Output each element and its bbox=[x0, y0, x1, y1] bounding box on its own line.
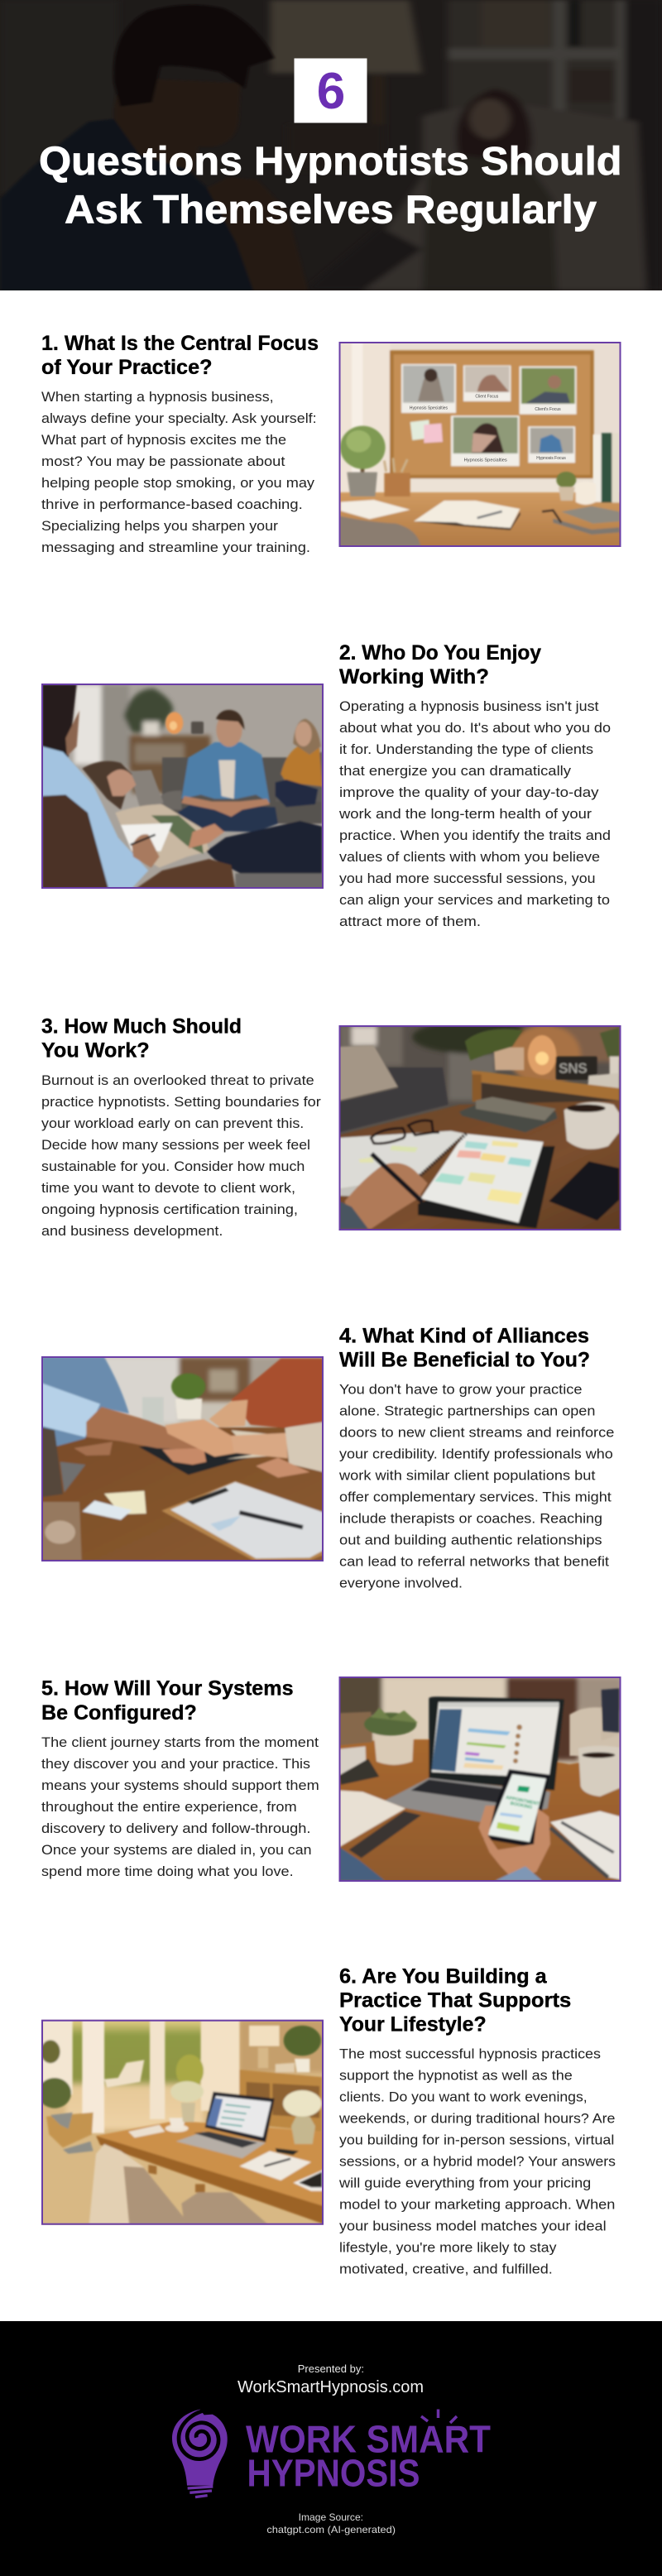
heading 6: 6. Are You Building a bbox=[339, 1964, 548, 1988]
body text 5: The client journey starts from the moment bbox=[41, 1734, 319, 1750]
photo: laptop and phone scheduling bbox=[335, 1673, 625, 1883]
body text 6: will guide everything from your pricing bbox=[338, 2175, 591, 2191]
photo: corkboard on desk: Client's Focus bbox=[535, 407, 561, 412]
body text 3 bbox=[41, 1072, 321, 1239]
wordmark bbox=[246, 2418, 491, 2494]
body text 4: doors to new client streams and reinforce bbox=[339, 1425, 614, 1440]
panel: question 6 bbox=[38, 1964, 616, 2277]
body text 2: it for. Understanding the type of clients bbox=[339, 741, 593, 757]
panel: question 5 bbox=[41, 1673, 625, 1883]
panel: question 4 bbox=[38, 1324, 614, 1590]
heading 5 bbox=[41, 1677, 294, 1725]
body text 4: offer complementary services. This might bbox=[339, 1489, 612, 1504]
heading 3: You Work? bbox=[41, 1039, 150, 1063]
heading 5: Be Configured? bbox=[41, 1701, 197, 1725]
body text 4: can lead to referral networks that benefit bbox=[339, 1554, 609, 1569]
body text 2: you had more successful sessions, you bbox=[339, 871, 596, 886]
heading 1 bbox=[41, 332, 319, 379]
body text 4: out and building authentic relationships bbox=[339, 1533, 602, 1547]
body text 2: that energize you can dramatically bbox=[339, 763, 572, 779]
photo: hypnosis session with clients bbox=[38, 680, 328, 890]
icon: rays above the A bbox=[421, 2410, 457, 2423]
body text 6: The most successful hypnosis practices bbox=[339, 2046, 601, 2062]
body text 6: lifestyle, you're more likely to stay bbox=[339, 2239, 557, 2256]
body text 3: Burnout is an overlooked threat to private bbox=[41, 1072, 314, 1088]
body text 6: your business model matches your ideal bbox=[339, 2218, 607, 2234]
body text 2: can align your services and marketing to bbox=[339, 892, 610, 908]
heading 5: 5. How Will Your Systems bbox=[41, 1677, 294, 1700]
body text 2: improve the quality of your day-to-day bbox=[339, 784, 599, 800]
body text 6: model to your marketing approach. When bbox=[339, 2196, 615, 2213]
body text 5: means your systems should support them bbox=[41, 1777, 319, 1793]
image source credit: chatgpt.com (AI-generated) bbox=[266, 2524, 396, 2535]
heading 1: of Your Practice? bbox=[41, 356, 212, 379]
body text 4: include therapists or coaches. Reaching bbox=[339, 1511, 602, 1526]
wordmark: WORK SMART bbox=[246, 2418, 491, 2461]
title: Ask Themselves Regularly bbox=[65, 189, 597, 232]
photo: corkboard on desk bbox=[335, 339, 625, 549]
body text 3: and business development. bbox=[41, 1223, 223, 1239]
panel: footer bbox=[0, 2321, 662, 2576]
body text 2 bbox=[338, 698, 611, 929]
photo: corkboard on desk: Hypnosis Focus bbox=[536, 456, 566, 461]
body text 2: practice. When you identify the traits and bbox=[339, 827, 611, 843]
body text 5: they discover you and your practice. This bbox=[41, 1756, 310, 1772]
heading 4 bbox=[339, 1324, 590, 1372]
body text 1: When starting a hypnosis business, bbox=[41, 389, 274, 405]
panel: question 2 bbox=[38, 641, 611, 929]
heading 2: Working With? bbox=[339, 665, 489, 688]
body text 2: Operating a hypnosis business isn't just bbox=[339, 698, 599, 714]
body text 1: most? You may be passionate about bbox=[41, 453, 285, 469]
body text 1: helping people stop smoking, or you may bbox=[41, 475, 315, 491]
image source credit: Image Source: bbox=[299, 2511, 363, 2523]
body text 4: alone. Strategic partnerships can open bbox=[339, 1403, 595, 1418]
body text 6: you building for in-person sessions, virtual bbox=[339, 2132, 614, 2148]
body text 4: everyone involved. bbox=[339, 1576, 463, 1590]
logo bbox=[172, 2410, 491, 2497]
heading 6: Your Lifestyle? bbox=[339, 2012, 487, 2036]
body text 1: always define your specialty. Ask yourself: bbox=[41, 410, 317, 426]
body text 6: clients. Do you want to work evenings, bbox=[339, 2089, 588, 2105]
body text 6 bbox=[338, 2046, 616, 2277]
body text 1: Specializing helps you sharpen your bbox=[41, 518, 278, 534]
panel: hero header bbox=[0, 0, 662, 290]
body text 1 bbox=[41, 389, 317, 555]
body text 1: messaging and streamline your training. bbox=[41, 540, 310, 555]
body text 6: weekends, or during traditional hours? Are bbox=[338, 2110, 615, 2127]
body text 1: What part of hypnosis excites me the bbox=[41, 432, 286, 448]
number box bbox=[295, 58, 367, 122]
heading 6 bbox=[339, 1964, 571, 2036]
title: Questions Hypnotists Should bbox=[39, 140, 622, 184]
photo: corkboard on desk: Hypnosis Specialties bbox=[464, 458, 507, 463]
wordmark: HYPNOSIS bbox=[247, 2451, 420, 2494]
photo: planner on coffee table: SNS bbox=[559, 1061, 587, 1077]
presented by label: Presented by: bbox=[298, 2363, 364, 2375]
body text 3: ongoing hypnosis certification training, bbox=[41, 1202, 298, 1217]
body text 3: practice hypnotists. Setting boundaries for bbox=[41, 1094, 321, 1110]
heading 6: Practice That Supports bbox=[339, 1989, 571, 2012]
body text 5: throughout the entire experience, from bbox=[41, 1799, 297, 1815]
body text 5: Once your systems are dialed in, you can bbox=[41, 1842, 311, 1858]
title bbox=[39, 140, 622, 232]
image source credit bbox=[266, 2511, 396, 2535]
photo: laptop and phone scheduling: APPOINTMENT bbox=[506, 1796, 540, 1807]
body text 3: time you want to devote to client work, bbox=[41, 1180, 295, 1196]
heading 3 bbox=[41, 1015, 242, 1063]
heading 1: 1. What Is the Central Focus bbox=[41, 332, 319, 355]
body text 2: attract more of them. bbox=[339, 914, 481, 929]
photo: sunny home office bbox=[38, 2016, 328, 2225]
body text 2: about what you do. It's about who you do bbox=[339, 720, 611, 736]
photo: corkboard on desk: Client Focus bbox=[475, 395, 499, 400]
body text 3: your workload early on can prevent this. bbox=[41, 1115, 304, 1131]
panel: question 3 bbox=[41, 1015, 625, 1239]
heading 4: Will Be Beneficial to You? bbox=[339, 1349, 590, 1372]
heading 2 bbox=[339, 641, 541, 688]
hero background photo bbox=[0, 0, 662, 290]
body text 4: You don't have to grow your practice bbox=[339, 1382, 583, 1397]
body text 5: discovery to delivery and follow-through. bbox=[41, 1820, 311, 1836]
body text 3: sustainable for you. Consider how much bbox=[41, 1158, 305, 1174]
body text 5: spend more time doing what you love. bbox=[41, 1864, 294, 1879]
body text 1: thrive in performance-based coaching. bbox=[41, 496, 303, 512]
photo: laptop and phone scheduling: BOOKING bbox=[510, 1801, 533, 1811]
body text 4: work with similar client populations but bbox=[338, 1468, 596, 1483]
icon: spiral light bulb bbox=[172, 2410, 228, 2497]
heading 4: 4. What Kind of Alliances bbox=[339, 1324, 589, 1347]
photo: stacked hands at table bbox=[38, 1353, 328, 1562]
panel: question 1 bbox=[41, 332, 625, 555]
body text 3: Decide how many sessions per week feel bbox=[41, 1137, 310, 1153]
body text 6: support the hypnotist as well as the bbox=[339, 2067, 573, 2084]
heading 3: 3. How Much Should bbox=[41, 1015, 242, 1038]
body text 6: sessions, or a hybrid model? Your answers bbox=[339, 2153, 616, 2170]
body text 4: your credibility. Identify professionals who bbox=[339, 1446, 613, 1461]
body text 2: work and the long-term health of your bbox=[338, 806, 592, 822]
body text 6: motivated, creative, and fulfilled. bbox=[339, 2261, 553, 2277]
body text 5 bbox=[41, 1734, 319, 1879]
body text 4 bbox=[338, 1382, 614, 1590]
number box: 6 bbox=[317, 63, 345, 120]
heading 2: 2. Who Do You Enjoy bbox=[339, 641, 541, 664]
website: WorkSmartHypnosis.com bbox=[237, 2378, 424, 2396]
photo: planner on coffee table bbox=[335, 1020, 625, 1231]
body text 2: values of clients with whom you believe bbox=[339, 849, 600, 865]
photo: corkboard on desk: Hypnosis Specialties bbox=[410, 405, 449, 410]
